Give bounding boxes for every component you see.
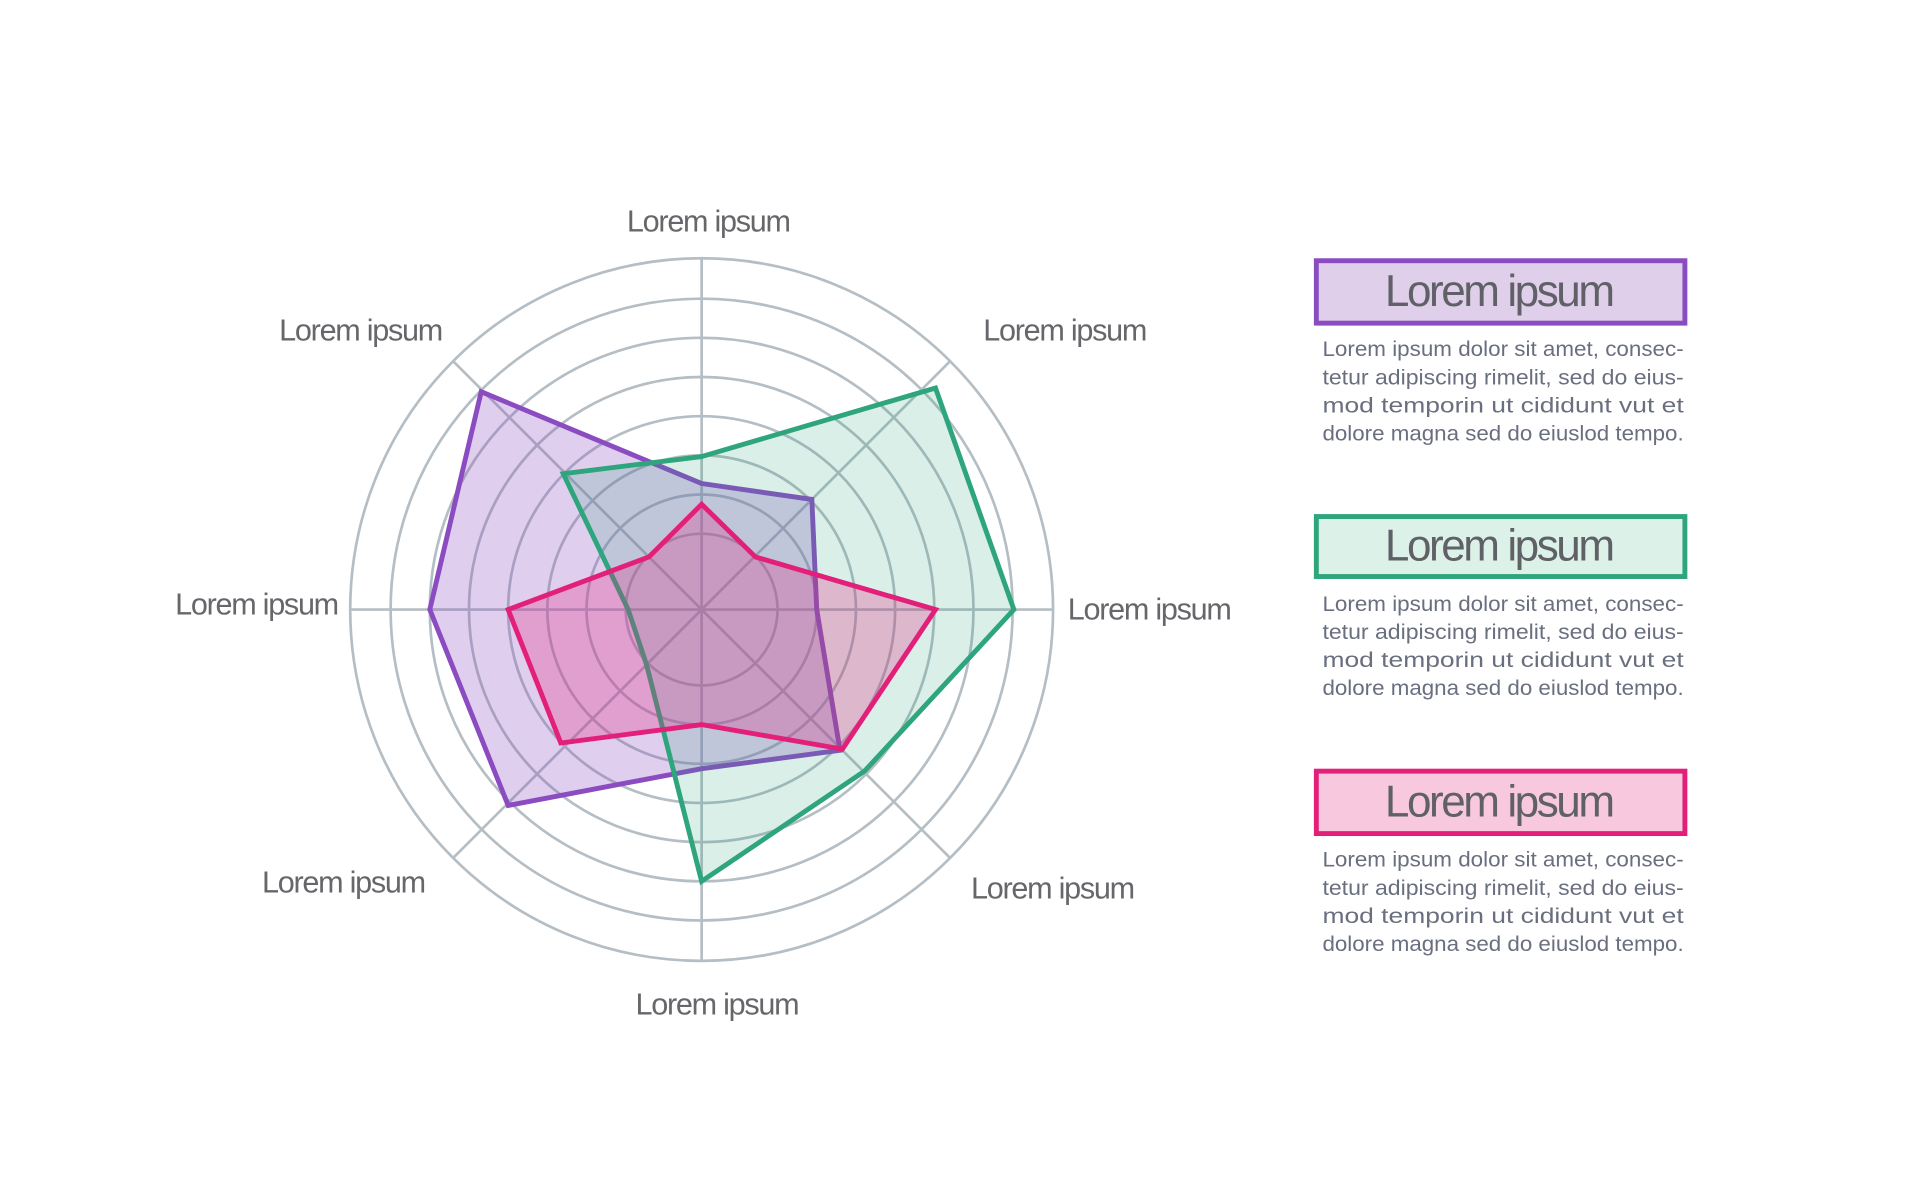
legend: pink: Lorem ipsum	[1385, 777, 1615, 826]
axis labels: Lorem ipsum	[971, 871, 1135, 905]
legend: pink: Lorem ipsum dolor sit amet, consec-	[1322, 849, 1684, 872]
series: purple	[430, 392, 840, 805]
legend: pink	[1316, 771, 1685, 956]
legend: pink: dolore magna sed do eiuslod tempo.	[1322, 933, 1684, 956]
legend: green: mod temporin ut cididunt vut et	[1322, 649, 1684, 672]
legend: purple: tetur adipiscing rimelit, sed do eius-	[1322, 366, 1684, 389]
legend: purple: Lorem ipsum	[1385, 267, 1615, 316]
legend: purple: mod temporin ut cididunt vut et	[1322, 395, 1684, 418]
axis labels: Lorem ipsum	[983, 313, 1147, 347]
axis labels: Lorem ipsum	[1068, 592, 1232, 626]
axis labels: Lorem ipsum	[175, 587, 339, 621]
axis labels: Lorem ipsum	[279, 313, 443, 347]
radar chart	[175, 204, 1232, 1022]
axis labels: Lorem ipsum	[627, 204, 791, 238]
series: green	[563, 388, 1014, 881]
axis labels: Lorem ipsum	[636, 988, 800, 1022]
legend: green: Lorem ipsum dolor sit amet, consec-	[1322, 593, 1684, 616]
axis labels	[175, 204, 1232, 1022]
legend: green: Lorem ipsum	[1385, 522, 1615, 571]
axis labels: Lorem ipsum	[262, 865, 426, 899]
legend: green	[1316, 517, 1685, 700]
legend: pink: mod temporin ut cididunt vut et	[1322, 905, 1684, 928]
legend: purple	[1316, 261, 1685, 446]
legend: pink: tetur adipiscing rimelit, sed do eius-	[1322, 877, 1684, 900]
legend: green: dolore magna sed do eiuslod tempo.	[1322, 677, 1684, 700]
legend: green: tetur adipiscing rimelit, sed do eius-	[1322, 621, 1684, 644]
series: pink	[508, 504, 936, 749]
legend: purple: Lorem ipsum dolor sit amet, consec-	[1322, 338, 1684, 361]
legend: purple: dolore magna sed do eiuslod tempo.	[1322, 423, 1684, 446]
